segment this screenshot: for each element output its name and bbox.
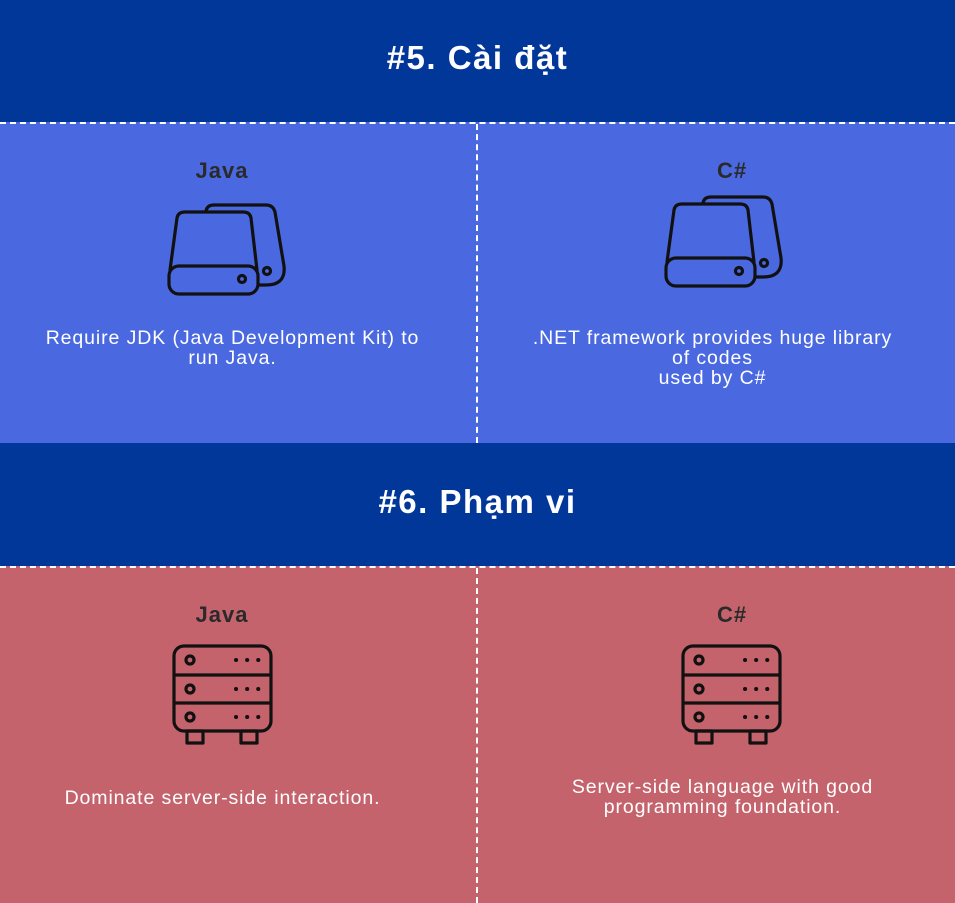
header: Cài đặt: #5. Cài đặt xyxy=(387,39,568,76)
text: C# install: of codes xyxy=(672,347,753,369)
text: Java install xyxy=(46,327,419,369)
label: Java scope: Java xyxy=(196,602,248,627)
icon: server java xyxy=(174,646,271,743)
text: C# scope: programming foundation. xyxy=(604,796,841,818)
icon: drives csharp xyxy=(666,197,781,286)
label: C# install: C# xyxy=(717,158,747,183)
text: Java scope: Dominate server-side interaction. xyxy=(65,787,380,809)
header: Cài đặt xyxy=(0,0,955,122)
text: Java install: Require JDK (Java Development Kit) to xyxy=(46,327,419,349)
text: C# scope xyxy=(572,776,873,818)
header: Phạm vi xyxy=(0,443,955,566)
text: C# install: used by C# xyxy=(659,367,766,389)
text: C# install xyxy=(533,327,892,389)
header: Phạm vi: #6. Phạm vi xyxy=(378,483,577,520)
icon: server csharp xyxy=(683,646,780,743)
label: C# scope: C# xyxy=(717,602,747,627)
panel: installation xyxy=(0,122,955,443)
label: Java install: Java xyxy=(196,158,248,183)
text: Java install: run Java. xyxy=(188,347,277,369)
text: C# scope: Server-side language with good xyxy=(572,776,873,798)
text: C# install: .NET framework provides huge library xyxy=(533,327,892,349)
panel: scope xyxy=(0,566,955,903)
